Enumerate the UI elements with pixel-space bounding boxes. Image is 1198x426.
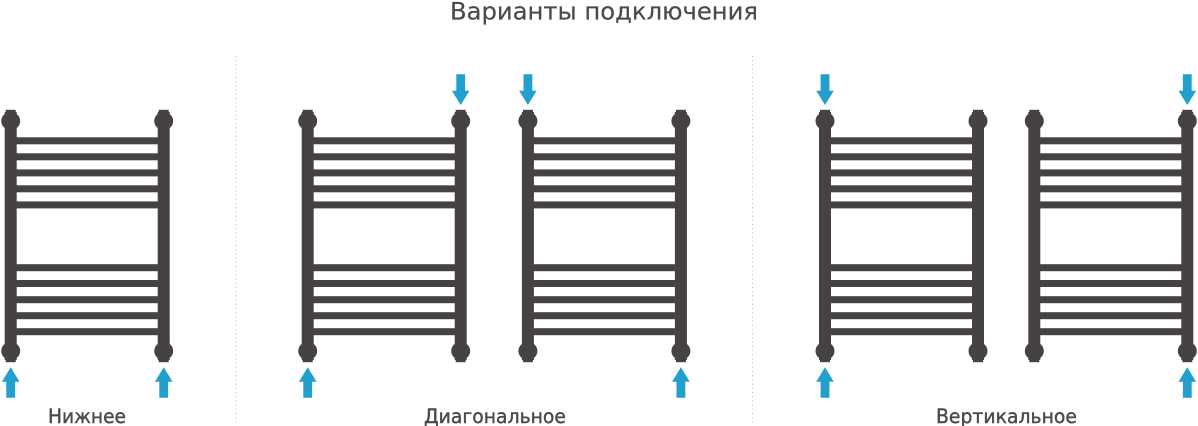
- towel rail 1: [1, 110, 173, 362]
- towel rail 3: [518, 110, 690, 362]
- group: vertical connection: [816, 74, 1197, 426]
- towel rail 5: [1025, 110, 1197, 362]
- towel rail 4: [816, 110, 988, 362]
- arrow: top left inlet on rail 3: [519, 74, 537, 105]
- divider: right: [752, 56, 754, 422]
- arrow: top right inlet on rail 5: [1178, 74, 1196, 105]
- towel rail 2: [298, 110, 470, 362]
- divider: left: [235, 56, 237, 422]
- group: bottom connection: [1, 110, 173, 426]
- arrow: bottom right inlet on rail 5: [1178, 367, 1196, 398]
- arrow: bottom left inlet on rail 2: [299, 367, 316, 398]
- arrow: bottom left inlet on rail 4: [816, 367, 834, 398]
- arrow: bottom left inlet: [2, 367, 20, 398]
- group: diagonal connection: [298, 74, 690, 426]
- arrow: bottom right inlet: [155, 367, 172, 398]
- arrow: top left inlet on rail 4: [816, 74, 834, 105]
- arrow: top right inlet on rail 2: [452, 74, 470, 105]
- arrow: bottom right inlet on rail 3: [672, 367, 690, 398]
